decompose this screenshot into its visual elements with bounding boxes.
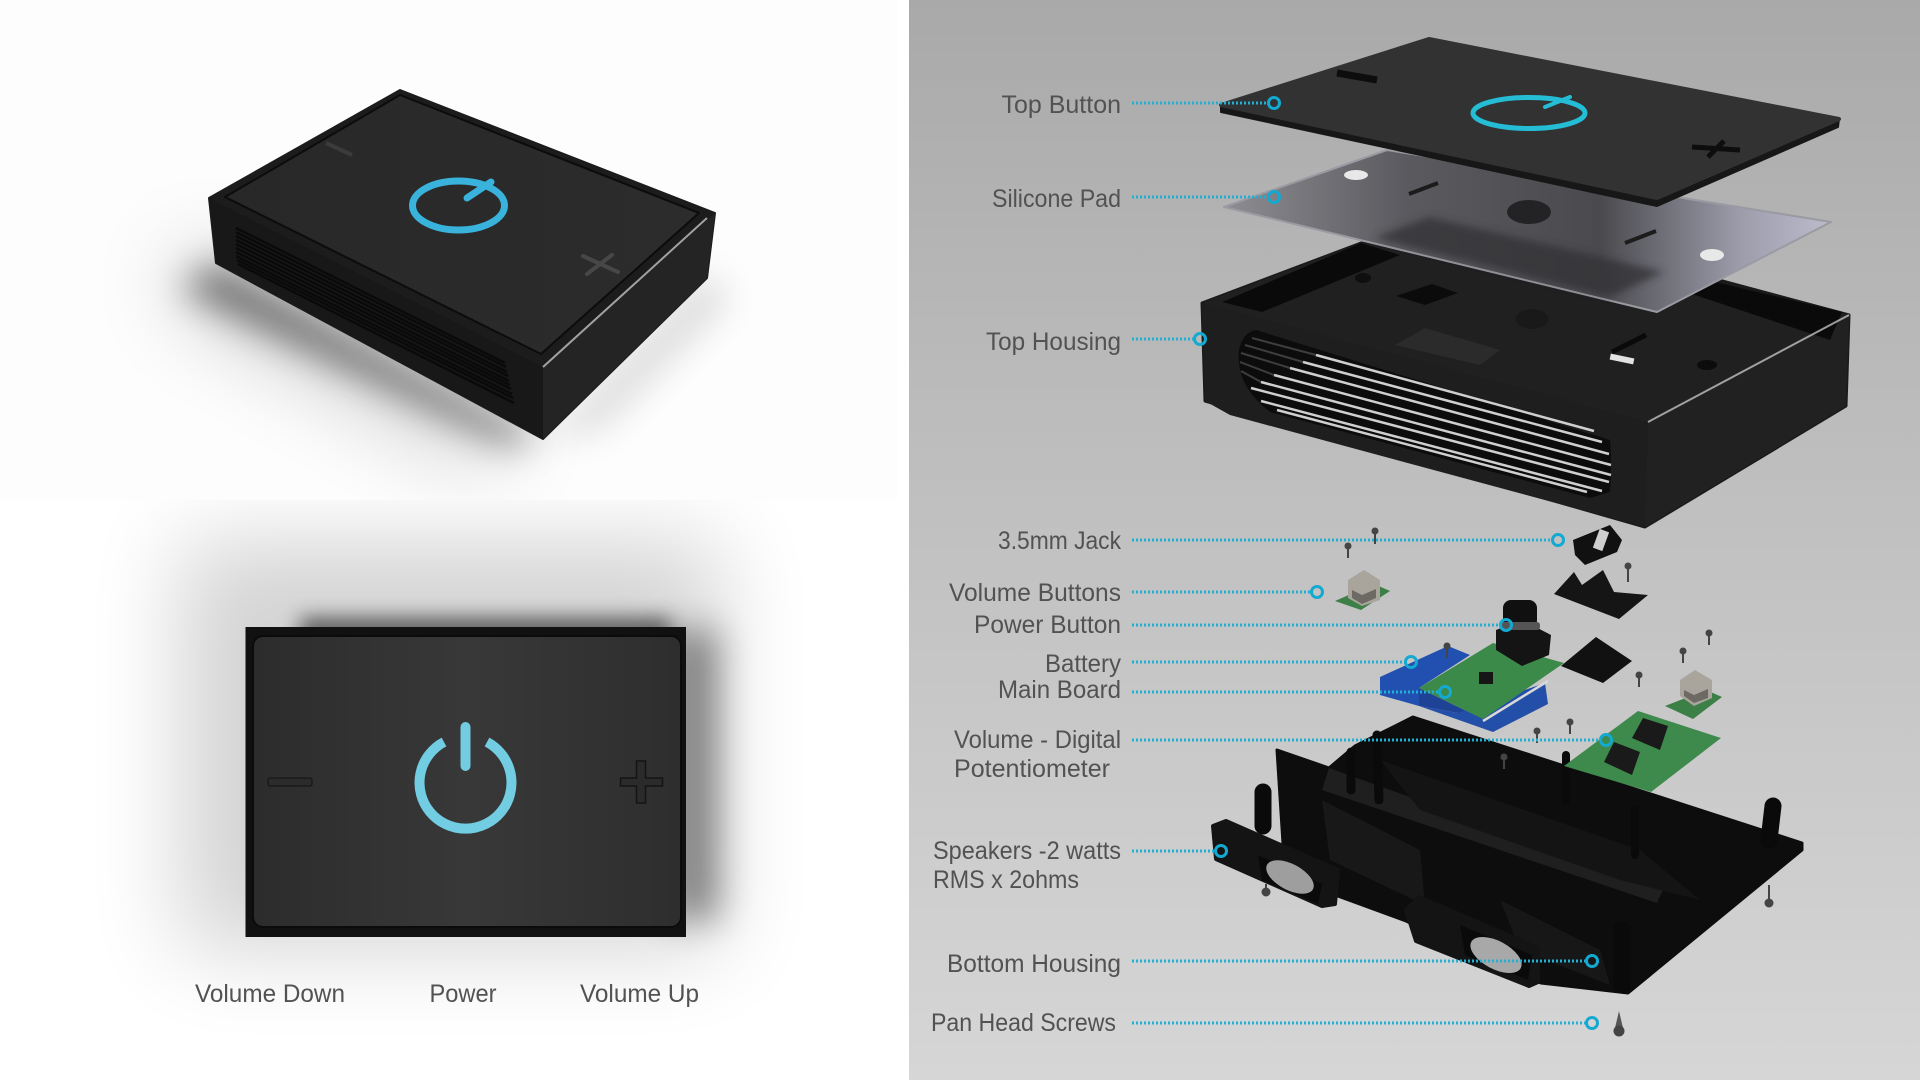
- device shadow: [170, 250, 730, 460]
- panel: assembled device, angled view: [170, 90, 730, 460]
- callout: battery: Battery: [1045, 650, 1121, 678]
- callout: pan head screws: Pan Head Screws: [931, 1009, 1116, 1037]
- panel: device, top view: [180, 540, 720, 1008]
- callout: top button: [1002, 91, 1280, 119]
- icon: minus: [326, 143, 352, 155]
- part: speaker right: [1406, 897, 1538, 986]
- icon: plus: [583, 255, 618, 274]
- callout: jack: 3.5mm Jack: [998, 527, 1121, 555]
- callout: silicone pad: [992, 185, 1280, 213]
- part: main board: [1419, 643, 1564, 721]
- icon: plus: [620, 761, 662, 803]
- screws: [1262, 528, 1772, 906]
- label: volume down: Volume Down: [195, 980, 345, 1008]
- exploded view: [1202, 39, 1849, 1036]
- part: volume button left: [1335, 570, 1390, 610]
- callout: top housing: [986, 328, 1206, 356]
- callouts: [931, 91, 1612, 1037]
- callout: speakers: Speakers -2 watts: [933, 837, 1121, 865]
- callout: speakers: [933, 837, 1226, 894]
- posts: [1263, 735, 1773, 985]
- callout: bottom housing: Bottom Housing: [947, 950, 1121, 978]
- part: silicone pad: [1224, 150, 1831, 312]
- part: bracket: [1554, 570, 1648, 619]
- top face: [253, 636, 681, 927]
- part: battery: [1380, 646, 1548, 732]
- label: volume up: Volume Up: [580, 980, 699, 1008]
- panel: exploded view background: [909, 0, 1920, 1080]
- device body: [246, 627, 686, 937]
- icon: power symbol: [412, 181, 504, 230]
- speaker vents: [236, 228, 514, 403]
- top face: [225, 95, 699, 354]
- callout: battery: [1045, 650, 1416, 678]
- callout: pan head screws: [931, 1009, 1598, 1037]
- part: small bracket: [1561, 637, 1632, 683]
- part: pan head screw: [1614, 1011, 1624, 1036]
- part: volume button right: [1665, 670, 1722, 719]
- icon: power symbol: [420, 727, 512, 829]
- callout: digital potentiometer: [954, 726, 1612, 783]
- callout: top button: Top Button: [1002, 91, 1121, 119]
- callout: speakers: RMS x 2ohms: [933, 866, 1079, 894]
- callout: bottom housing: [947, 950, 1598, 978]
- part: top housing: [1202, 243, 1849, 527]
- device body: [209, 90, 715, 439]
- part: digital potentiometer board: [1564, 711, 1721, 792]
- part: power button: [1496, 600, 1551, 666]
- part: top button plate: [1221, 39, 1839, 206]
- callout: silicone pad: Silicone Pad: [992, 185, 1121, 213]
- device shadow: [180, 540, 720, 950]
- panel: left background: [0, 0, 909, 1080]
- callout: jack: [998, 527, 1564, 555]
- label: power: Power: [430, 980, 496, 1008]
- part: bottom housing: [1263, 717, 1802, 993]
- callout: top housing: Top Housing: [986, 328, 1121, 356]
- speaker grille: [1239, 330, 1611, 498]
- callout: digital potentiometer: Volume - Digital: [954, 726, 1121, 754]
- callout: volume buttons: Volume Buttons: [949, 579, 1121, 607]
- callout: volume buttons: [949, 579, 1322, 607]
- part: jack: [1573, 525, 1622, 565]
- icon: minus: [268, 778, 312, 786]
- callout: power button: Power Button: [974, 611, 1121, 639]
- part: speaker left: [1213, 821, 1338, 906]
- callout: digital potentiometer: Potentiometer: [954, 755, 1110, 783]
- callout: main board: Main Board: [998, 676, 1121, 704]
- callout: power button: [974, 611, 1512, 639]
- callout: main board: [998, 676, 1450, 704]
